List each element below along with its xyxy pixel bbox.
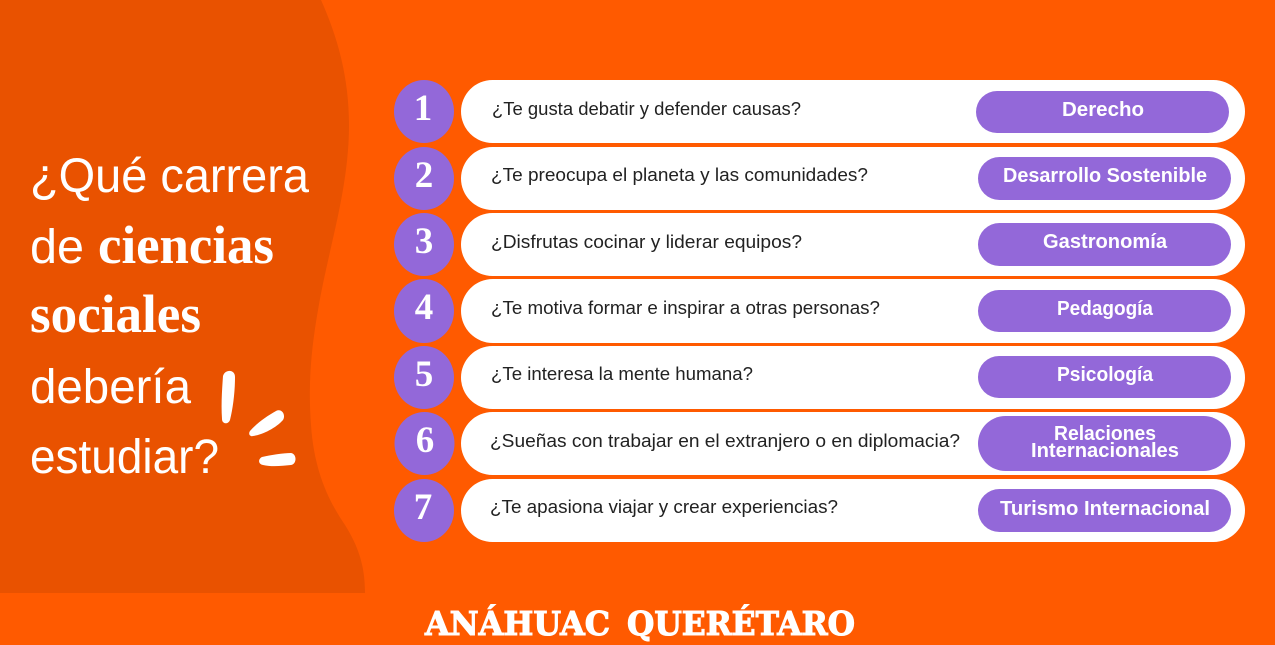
row 1 career: Derecho (1062, 99, 1144, 121)
row 3 career: Gastronomía (1043, 231, 1168, 253)
row 5 number circle (394, 346, 454, 409)
footer logo wordmark: QUERÉTARO (627, 603, 855, 643)
row 7 question: ¿Te apasiona viajar y crear experiencias? (490, 496, 838, 517)
row 2 number: 2 (415, 155, 433, 196)
row 4 question: ¿Te motiva formar e inspirar a otras personas? (491, 297, 880, 318)
title: de (30, 221, 84, 274)
row 6 career (1031, 423, 1179, 462)
row 2 career button (978, 157, 1231, 200)
title: ciencias (98, 215, 274, 275)
row 2 white pill (461, 147, 1245, 210)
row 5 question: ¿Te interesa la mente humana? (491, 363, 753, 384)
icon: emphasis spark marks (222, 371, 296, 466)
row 6 (394, 412, 1245, 475)
row 3 number circle (394, 213, 454, 276)
row 2 (394, 147, 1245, 210)
footer logo wordmark (424, 603, 855, 643)
title: estudiar? (30, 431, 219, 484)
row 1 white pill (461, 80, 1245, 143)
row 7 (394, 479, 1245, 542)
row 1 number: 1 (414, 88, 432, 129)
row 3 number: 3 (415, 221, 433, 262)
row 5 career: Psicología (1057, 364, 1154, 386)
row 6 number circle (394, 412, 454, 475)
row 1 number circle (394, 80, 454, 143)
row 1 career button (976, 91, 1229, 133)
row 4 number circle (394, 279, 454, 343)
row 6 question: ¿Sueñas con trabajar en el extranjero o en diplomacia? (490, 430, 960, 451)
row 4 number: 4 (415, 287, 433, 328)
row 7 white pill (461, 479, 1245, 542)
row 5 career button (978, 356, 1231, 398)
title: debería (30, 361, 191, 414)
row 2 career: Desarrollo Sostenible (1003, 165, 1207, 187)
row 7 career: Turismo Internacional (1000, 498, 1210, 520)
row 4 white pill (461, 279, 1245, 343)
row 4 career: Pedagogía (1057, 298, 1154, 320)
row 2 question: ¿Te preocupa el planeta y las comunidades? (491, 164, 868, 185)
row 3 (394, 213, 1245, 276)
title (30, 150, 309, 484)
footer logo wordmark: ANÁHUAC (424, 603, 610, 643)
row 7 career button (978, 489, 1231, 532)
row 4 career button (978, 290, 1231, 332)
row 6 white pill (461, 412, 1245, 475)
row 6 number: 6 (416, 420, 434, 461)
row 2 number circle (394, 147, 454, 210)
row 5 number: 5 (415, 354, 433, 395)
row 1 (394, 80, 1245, 143)
panel: left darker organic shape (0, 0, 365, 593)
row 3 white pill (461, 213, 1245, 276)
row 3 question: ¿Disfrutas cocinar y liderar equipos? (491, 231, 802, 252)
row 4 (394, 279, 1245, 343)
row 5 white pill (461, 346, 1245, 409)
row 7 number circle (394, 479, 454, 542)
row 6 career: Internacionales (1031, 440, 1179, 462)
title: ¿Qué carrera (30, 150, 309, 203)
row 5 (394, 346, 1245, 409)
row 3 career button (978, 223, 1231, 266)
row 6 career button (978, 416, 1231, 471)
row 7 number: 7 (414, 487, 432, 528)
title: sociales (30, 284, 201, 344)
row 1 question: ¿Te gusta debatir y defender causas? (492, 98, 801, 119)
row 6 career: Relaciones (1054, 423, 1156, 445)
